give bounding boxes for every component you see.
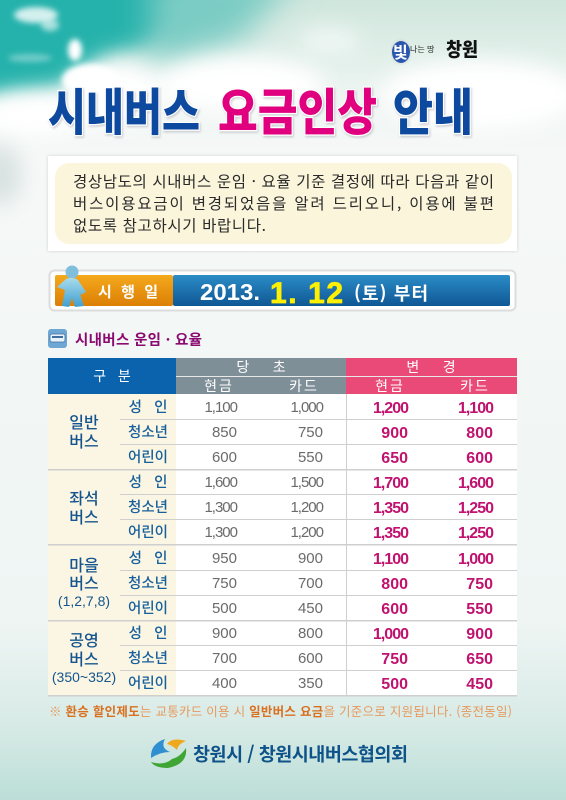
rider type labels	[128, 396, 168, 693]
group labels: 버스	[69, 646, 99, 670]
rider type labels: 성 인	[129, 396, 167, 417]
rider type labels: 청소년	[128, 496, 168, 517]
date banner: (토) 부터	[354, 280, 428, 306]
original fares: 1,500	[290, 474, 324, 491]
changed fares: 900	[466, 626, 493, 643]
changed fares: 800	[466, 425, 493, 442]
changed fares: 600	[381, 601, 408, 618]
table header: 당 초	[236, 357, 286, 377]
original fares: 750	[298, 424, 323, 441]
changed fares: 1,600	[458, 475, 494, 492]
notice panel: 경상남도의 시내버스 운임 · 요율 기준 결정에 따라 다음과 같이	[73, 170, 494, 192]
date banner	[50, 266, 516, 310]
changed fares: 1,350	[373, 525, 409, 542]
original fares: 1,600	[204, 474, 238, 491]
table header: 구 분	[93, 366, 131, 386]
original fares: 900	[298, 550, 323, 567]
changed fares: 1,700	[373, 475, 409, 492]
table header: 현금	[204, 376, 234, 396]
changed fares: 650	[466, 651, 493, 668]
title: 시내버스	[48, 73, 200, 145]
original fares: 1,200	[290, 499, 324, 516]
changed fares: 600	[466, 450, 493, 467]
group labels: 버스	[69, 428, 99, 452]
notice panel: 버스이용요금이 변경되었음을 알려 드리오니, 이용에 불편	[73, 192, 494, 214]
original fares: 900	[212, 625, 237, 642]
rider type labels: 성 인	[129, 622, 167, 643]
original fares: 500	[212, 600, 237, 617]
group labels: 공영	[69, 627, 99, 651]
group labels: 마을	[69, 552, 99, 576]
group labels: (350~352)	[52, 669, 116, 685]
changed fares: 500	[381, 676, 408, 693]
date banner: 1. 12	[270, 277, 343, 310]
original fares: 550	[298, 449, 323, 466]
original fares: 350	[298, 675, 323, 692]
original fares: 1,300	[204, 524, 238, 541]
original fares: 600	[212, 449, 237, 466]
icon: person	[57, 266, 86, 307]
original fares: 850	[212, 424, 237, 441]
logo: 빛나는 땅 창원: 창원	[446, 35, 478, 62]
table header: 변 경	[406, 357, 456, 377]
section heading: 시내버스 운임 · 요율	[75, 329, 202, 350]
original fares: 700	[298, 575, 323, 592]
original fares: 950	[212, 550, 237, 567]
changed fares: 800	[381, 576, 408, 593]
changed fares: 1,250	[458, 500, 494, 517]
original fares: 750	[212, 575, 237, 592]
table body background	[48, 394, 517, 696]
group labels: (1,2,7,8)	[58, 593, 110, 609]
changed fares: 450	[466, 676, 493, 693]
rider type labels: 청소년	[128, 572, 168, 593]
changed fares	[373, 400, 494, 693]
table header: 카드	[289, 376, 319, 396]
logo: 빛나는 땅 창원	[392, 35, 478, 63]
rider type labels: 어린이	[128, 521, 168, 542]
rider type labels: 청소년	[128, 647, 168, 668]
group labels: 버스	[69, 504, 99, 528]
fare table	[48, 357, 517, 696]
logo: 빛나는 땅 창원: 나는 땅	[410, 44, 435, 55]
changed fares: 1,100	[373, 551, 409, 568]
date banner: 시 행 일	[98, 281, 158, 302]
original fares: 1,200	[290, 524, 324, 541]
icon: bus	[48, 329, 67, 348]
changed fares: 550	[466, 601, 493, 618]
footer: city logo and organization: 창원시 / 창원시내버스협의회	[193, 741, 408, 767]
original fares: 1,100	[204, 399, 238, 416]
changed fares: 750	[381, 651, 408, 668]
table header: 카드	[460, 376, 490, 396]
changed fares: 1,000	[458, 551, 494, 568]
original fares	[204, 399, 324, 692]
table header: 현금	[375, 376, 405, 396]
date banner: 2013.	[200, 279, 260, 305]
rider type labels: 청소년	[128, 421, 168, 442]
original fares: 400	[212, 675, 237, 692]
original fares: 1,300	[204, 499, 238, 516]
rider type labels: 어린이	[128, 597, 168, 618]
original fares: 600	[298, 650, 323, 667]
changed fares: 1,350	[373, 500, 409, 517]
icon: Changwon city symbol	[151, 739, 186, 768]
original fares: 1,000	[290, 399, 324, 416]
changed fares: 750	[466, 576, 493, 593]
footnote: ※ 환승 할인제도는 교통카드 이용 시 일반버스 요금을 기준으로 지원됩니다. (종전동일)	[49, 701, 512, 720]
original fares: 700	[212, 650, 237, 667]
logo: 빛나는 땅 창원: 빛	[393, 39, 408, 63]
notice panel: 없도록 참고하시기 바랍니다.	[73, 214, 266, 236]
group labels: 좌석	[69, 485, 99, 509]
rider type labels: 성 인	[129, 547, 167, 568]
changed fares: 650	[381, 450, 408, 467]
rider type labels: 어린이	[128, 672, 168, 693]
original fares: 450	[298, 600, 323, 617]
changed fares: 1,100	[458, 400, 494, 417]
group labels	[52, 409, 116, 685]
original fares: 800	[298, 625, 323, 642]
title: 안내	[393, 73, 473, 145]
table header	[48, 357, 517, 396]
title	[48, 73, 473, 145]
rider type labels: 어린이	[128, 446, 168, 467]
changed fares: 1,250	[458, 525, 494, 542]
group labels: 일반	[69, 409, 99, 433]
title: 요금인상	[218, 73, 377, 145]
notice panel	[48, 156, 517, 251]
changed fares: 1,200	[373, 400, 409, 417]
changed fares: 1,000	[373, 626, 409, 643]
rider type labels: 성 인	[129, 471, 167, 492]
group labels: 버스	[69, 570, 99, 594]
changed fares: 900	[381, 425, 408, 442]
